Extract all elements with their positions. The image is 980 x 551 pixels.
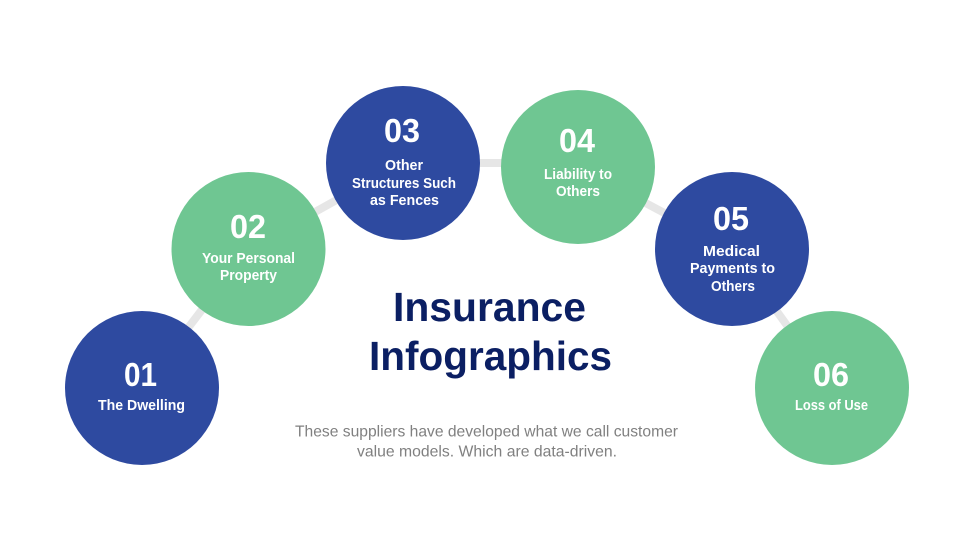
step 04: Liability to Others	[501, 90, 655, 244]
title	[369, 284, 612, 379]
title: Infographics	[369, 333, 612, 379]
step 04: Liability to Others: 04	[559, 122, 596, 159]
step 06: Loss of Use: Loss of Use	[795, 398, 868, 414]
description: These suppliers have developed what we call customer	[295, 424, 679, 440]
step 04: Liability to Others: Liability to	[544, 167, 612, 183]
step 06: Loss of Use: 06	[813, 356, 849, 393]
description	[295, 424, 679, 460]
step 01: The Dwelling: The Dwelling	[98, 398, 185, 414]
step 01: The Dwelling	[65, 311, 219, 465]
step 05: Medical Payments to Others: Payments to	[690, 261, 775, 277]
step 05: Medical Payments to Others: 05	[713, 200, 749, 237]
step 03: Other Structures Such as Fences: as Fences	[370, 193, 439, 209]
step 05: Medical Payments to Others	[655, 172, 809, 326]
step 03: Other Structures Such as Fences: Other	[385, 158, 423, 174]
step 05: Medical Payments to Others: Others	[711, 279, 755, 295]
step 05: Medical Payments to Others: Medical	[703, 244, 760, 260]
step 03: Other Structures Such as Fences: Structures Such	[352, 176, 456, 192]
connector arc	[142, 163, 832, 388]
step 03: Other Structures Such as Fences	[326, 86, 480, 240]
step 04: Liability to Others: Others	[556, 184, 600, 200]
step 02: Your Personal Property: Your Personal	[202, 251, 295, 267]
step 01: The Dwelling: 01	[124, 356, 157, 393]
step 02: Your Personal Property: 02	[230, 208, 266, 245]
step 02: Your Personal Property	[172, 172, 326, 326]
step 06: Loss of Use	[755, 311, 909, 465]
description: value models. Which are data-driven.	[357, 444, 617, 460]
step 02: Your Personal Property: Property	[220, 268, 277, 284]
title: Insurance	[393, 284, 586, 330]
step 03: Other Structures Such as Fences: 03	[384, 112, 420, 149]
